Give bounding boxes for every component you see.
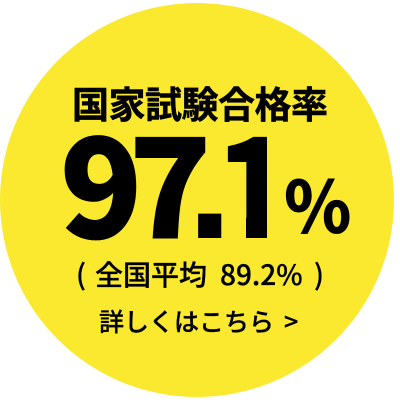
- heading: pass rate title: 国家試験合格率: [72, 75, 328, 129]
- percent sign: %: [284, 151, 351, 255]
- national average comparison: (: [76, 254, 86, 294]
- national average comparison: 89.2%: [220, 254, 303, 294]
- big number: 97.1: [64, 135, 267, 240]
- big number: 97.1: 97: [60, 81, 211, 277]
- details link: >: [284, 303, 298, 339]
- national average comparison: ): [314, 254, 324, 294]
- big number: 97.1: 1: [215, 81, 297, 277]
- big number: 97.1: .: [187, 90, 233, 273]
- details link: 詳しくはこちら: [99, 303, 274, 339]
- national average comparison: 全国平均: [95, 254, 207, 294]
